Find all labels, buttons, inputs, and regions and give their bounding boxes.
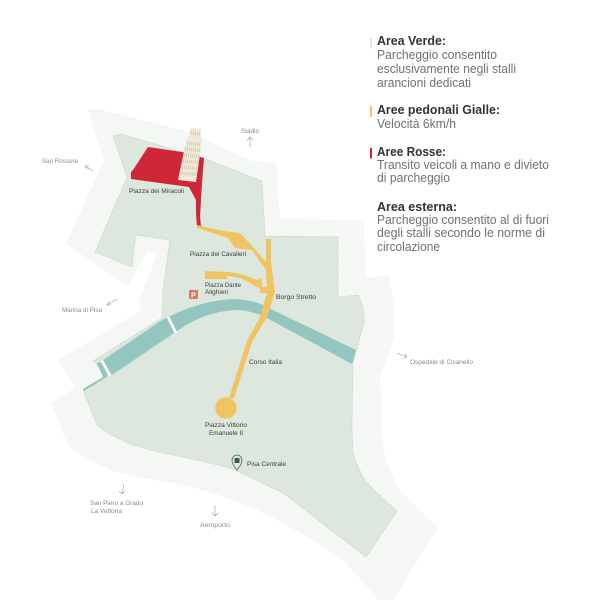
legend: area verde	[370, 34, 516, 90]
legend: area esterna: degli stalli secondo le norme di	[377, 226, 545, 240]
map labels: Piazza dei Cavalieri	[190, 251, 246, 258]
legend: aree pedonali gialle: Velocità 6km/h	[377, 117, 456, 131]
map labels: Emanuele II	[209, 430, 243, 437]
legend: aree pedonali gialle: Aree pedonali Gialle:	[377, 103, 500, 117]
directions labels: San Piero a Grado	[90, 500, 144, 507]
icon: parking	[189, 290, 198, 299]
legend: area esterna: Area esterna:	[377, 200, 457, 214]
legend: area esterna: Parcheggio consentito al di fuori	[377, 213, 549, 227]
map labels: Piazza dei Miracoli	[129, 188, 184, 195]
map labels: Alighieri	[205, 289, 228, 296]
directions labels	[42, 128, 474, 529]
legend: area verde: Area Verde:	[377, 34, 446, 48]
map labels: Piazza Dante	[205, 282, 241, 289]
directions labels: San Rossore	[42, 158, 79, 165]
legend: area esterna: circolazione	[377, 240, 440, 254]
red area: Piazza dei Miracoli	[131, 147, 204, 227]
legend: area verde: arancioni dedicati	[377, 76, 471, 90]
map labels: Corso Italia	[249, 359, 282, 366]
legend: area verde: esclusivamente negli stalli	[377, 62, 516, 76]
direction arrows	[85, 137, 407, 516]
yellow pedestrian areas	[197, 225, 275, 419]
river Arno	[83, 299, 356, 391]
directions labels: Marina di Pisa	[62, 307, 103, 314]
legend: area verde: Parcheggio consentito	[377, 48, 497, 62]
map labels: Borgo Stretto	[276, 294, 316, 301]
legend: aree rosse: Aree Rosse:	[377, 145, 446, 159]
legend: aree rosse	[370, 145, 549, 185]
directions labels: Aeroporto	[200, 522, 231, 529]
map labels	[129, 188, 316, 468]
directions labels: La Vettoria	[91, 508, 123, 515]
icon: leaning tower of Pisa	[178, 128, 202, 182]
directions labels: Stadio	[241, 128, 260, 135]
legend: aree rosse: di parcheggio	[377, 171, 450, 185]
bridges	[102, 317, 176, 376]
legend	[370, 34, 549, 254]
directions labels: Ospedale di Cisanello	[410, 359, 474, 366]
outer area	[51, 109, 438, 600]
legend: aree pedonali gialle	[370, 103, 500, 131]
map labels: Piazza Vittorio	[205, 422, 247, 429]
icon: station pin	[232, 455, 242, 470]
green area	[83, 134, 397, 557]
legend: area esterna	[377, 200, 549, 254]
icon: parking: P	[191, 292, 196, 299]
legend: aree rosse: Transito veicoli a mano e divieto	[377, 158, 549, 172]
map labels: Pisa Centrale	[247, 461, 286, 468]
